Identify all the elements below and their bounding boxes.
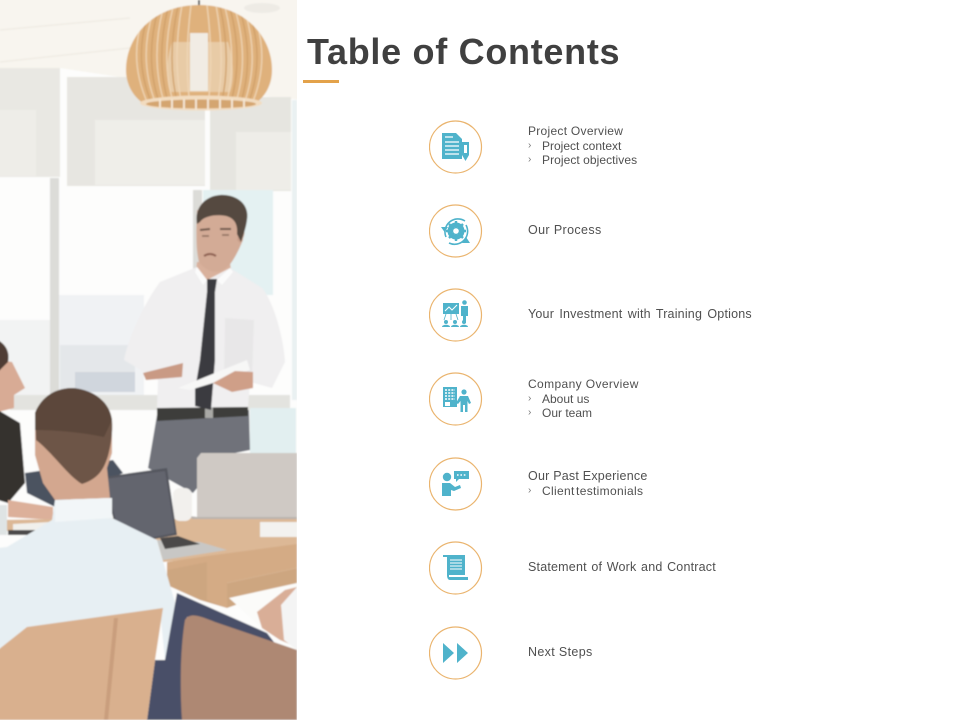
bullet: Our team: › — [528, 407, 531, 418]
bullet: Project objectives: Project objectives — [542, 153, 637, 167]
bullet: Our team: Our team — [542, 406, 592, 420]
bullet: Project objectives: › — [528, 154, 531, 165]
bullet: Project context: Project context — [542, 139, 621, 153]
icon: trainer presenting to audience — [429, 288, 482, 342]
icon: gear with cycle arrows — [429, 204, 482, 258]
text: Statement of Work and Contract: Statement of Work and Contract — [528, 560, 716, 574]
item: Next Steps — [429, 626, 593, 680]
text: Your Investment with Training Options: Your Investment with Training Options — [528, 307, 752, 321]
bullet: Project context: › — [528, 140, 531, 151]
icon: document and pen — [429, 120, 482, 174]
text: Next Steps: Next Steps — [528, 645, 593, 659]
item: Company Overview — [429, 372, 639, 426]
item: Statement of Work and Contract — [429, 541, 716, 595]
item: Your Investment with Training Options — [429, 288, 752, 342]
icon: scroll contract — [429, 541, 482, 595]
title underline — [303, 80, 339, 83]
icon: fast forward — [429, 626, 482, 680]
icon: building and person — [429, 372, 482, 426]
icon: person with speech bubble — [429, 457, 482, 511]
item: Our Process — [429, 204, 602, 258]
item: Project Overview — [429, 120, 637, 174]
bullet: About us: About us — [542, 392, 589, 406]
title: Table of Contents — [307, 31, 620, 72]
bullet: Client testimonials: Client testimonials — [542, 484, 643, 498]
photo: meeting room with presenter — [0, 0, 297, 720]
text: Our Past Experience: Our Past Experience — [528, 469, 648, 483]
text: Company Overview: Company Overview — [528, 377, 639, 391]
item: Our Past Experience — [429, 457, 648, 511]
bullet: About us: › — [528, 393, 531, 404]
bullet: Client testimonials: › — [528, 485, 531, 496]
text: Project Overview: Project Overview — [528, 124, 623, 138]
text: Our Process: Our Process — [528, 223, 602, 237]
